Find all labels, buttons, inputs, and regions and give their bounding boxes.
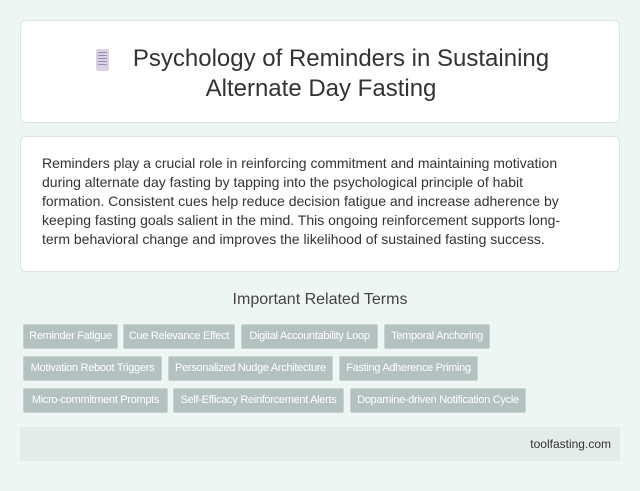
icon: document: [96, 49, 109, 71]
intro text card: during alternate day fasting by tapping into the psychological principle of habit: [42, 174, 523, 190]
intro text card: Reminders play a crucial role in reinforcing commitment and maintaining motivation: [42, 155, 557, 171]
title: Alternate Day Fasting: [206, 75, 436, 102]
footer: toolfasting.com: [530, 437, 611, 451]
tags: Dopamine-driven Notification Cycle: [357, 394, 519, 406]
intro text card: keeping fasting goals salient in the mind. This ongoing reinforcement supports long-: [42, 212, 560, 228]
tags: Reminder Fatigue: [29, 330, 112, 342]
section heading: Important Related Terms: [233, 291, 407, 308]
title: Psychology of Reminders in Sustaining: [133, 45, 549, 72]
tags: Fasting Adherence Priming: [346, 362, 471, 374]
intro text card: formation. Consistent cues help reduce decision fatigue and increase adherence by: [42, 193, 559, 209]
tags: Personalized Nudge Architecture: [175, 362, 326, 374]
footer: [20, 427, 620, 461]
tags: Motivation Reboot Triggers: [31, 362, 154, 374]
tags: Cue Relevance Effect: [129, 330, 229, 342]
tags: Micro-commitment Prompts: [32, 394, 159, 406]
intro text card: [20, 136, 620, 272]
intro text card: term behavioral change and improves the likelihood of sustained fasting success.: [42, 231, 545, 247]
title: [133, 45, 549, 102]
tags: Temporal Anchoring: [391, 330, 483, 342]
tags: Digital Accountability Loop: [249, 330, 370, 342]
header card: [20, 20, 620, 123]
tags: Self-Efficacy Reinforcement Alerts: [181, 394, 336, 406]
